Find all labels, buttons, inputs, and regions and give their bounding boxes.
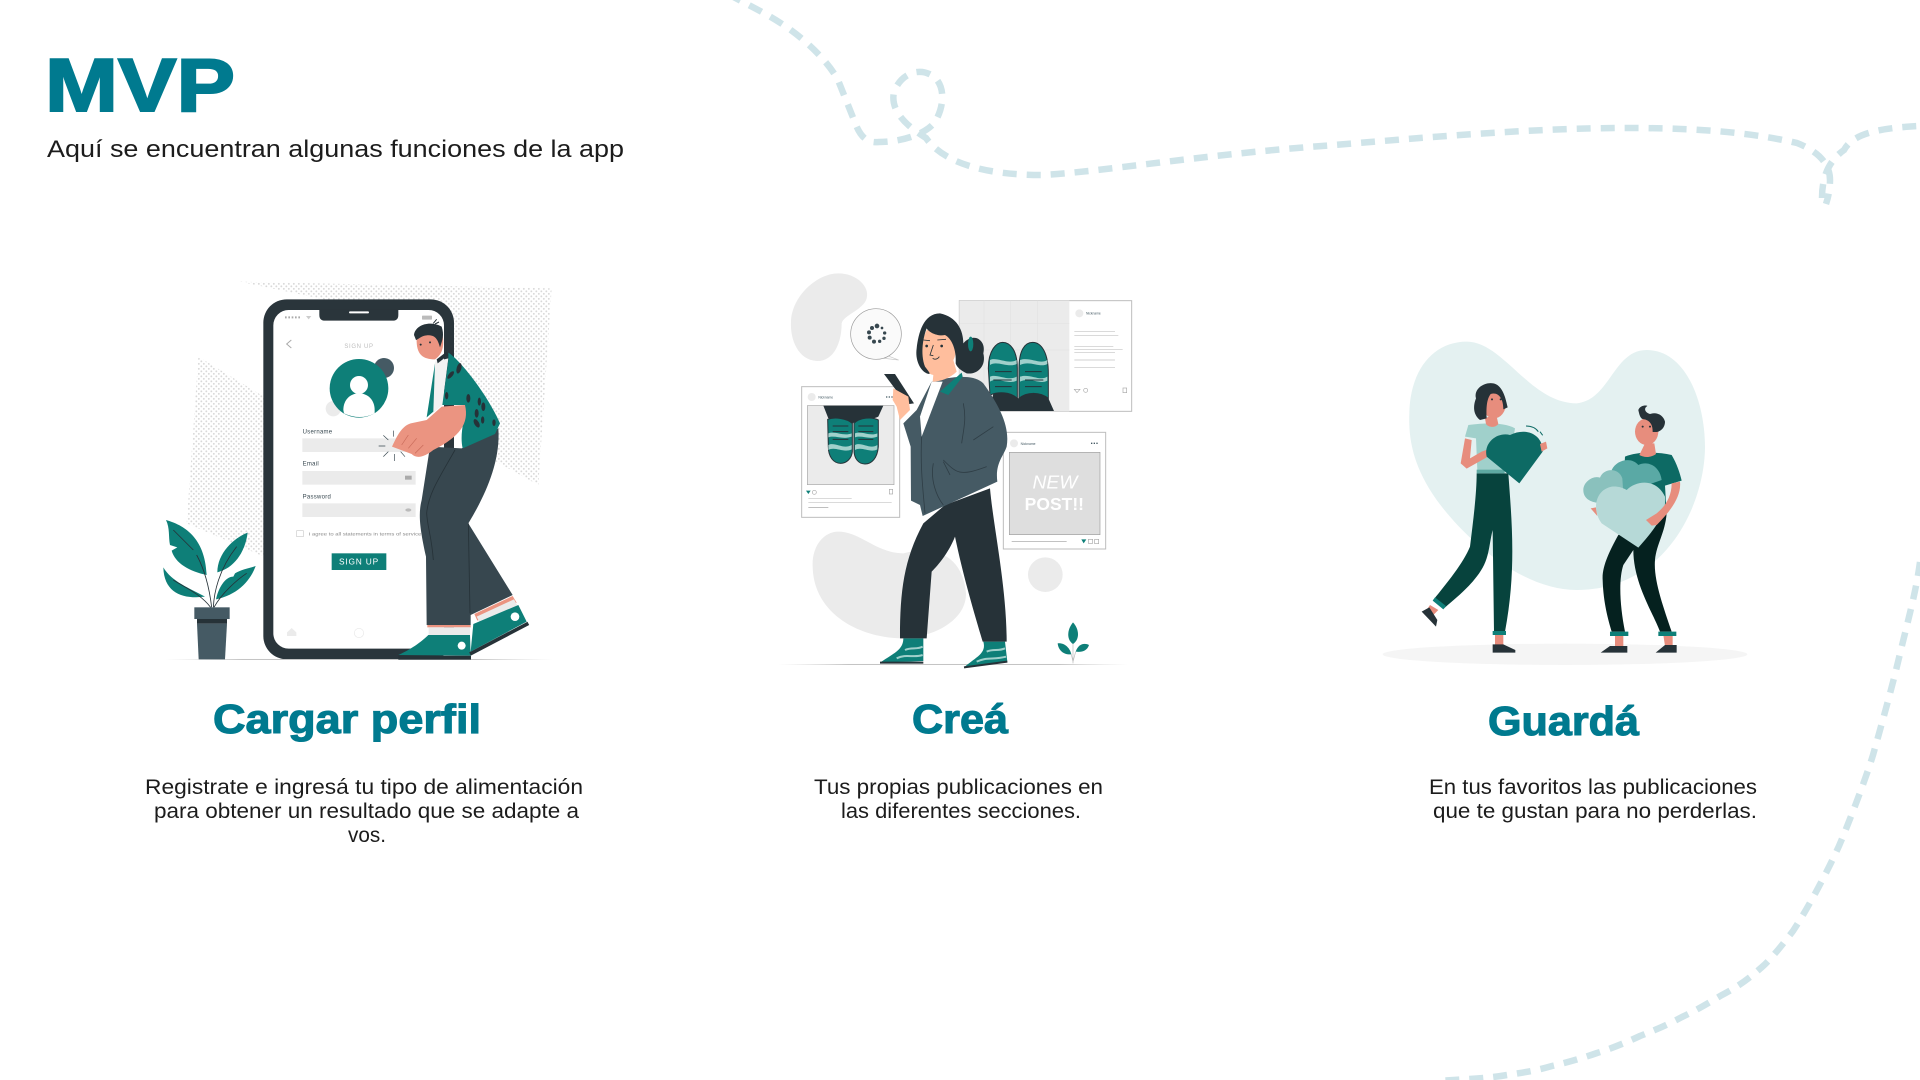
phone: SIGN UP [344,344,374,350]
man [1583,405,1682,653]
post: new post [1003,432,1106,549]
ground line [778,663,1128,666]
text: cargar perfil description: para obtener un resultado que se adapte a [154,799,579,823]
text: cargar perfil description: Registrate e ingresá tu tipo de alimentación [145,775,583,799]
ground ellipse [1383,644,1747,665]
phone: I agree to all statements in terms of service [309,532,422,538]
text: guardá description: En tus favoritos las publicaciones [1429,775,1757,799]
post: top right [959,301,1132,411]
man [379,319,528,660]
text: creá description [814,775,1103,823]
post: new post: POST!! [1025,494,1084,514]
woman [1422,383,1547,653]
text: cargar perfil description: vos. [348,823,386,847]
illustration: man signing up on giant phone [163,282,553,660]
heading: guardá: Guardá [1488,698,1639,744]
heading: cargar perfil: Cargar perfil [213,696,481,742]
decorative dashed line: bottom right [1438,562,1920,1080]
phone: Email [303,462,319,468]
panel: cargar perfil [145,282,583,847]
post: new post: NEW [1032,472,1079,493]
heading: creá: Creá [912,696,1008,742]
dotted background shapes [187,282,552,557]
sprout [1058,622,1089,663]
loading bubble [851,309,901,360]
background blobs [791,273,1063,638]
post: left: Nickname [818,396,833,400]
ground line [165,658,553,661]
phone: Password [303,494,331,500]
text: cargar perfil description [145,775,583,847]
phone: SIGN UP [339,556,379,566]
post: new post: Nickname [1021,442,1036,446]
phone: Username [303,429,333,435]
illustration: two people holding hearts [1383,342,1747,665]
subtitle: Aquí se encuentran algunas funciones de la app [47,136,624,163]
post: left [802,387,900,517]
text: creá description: Tus propias publicaciones en [814,775,1103,799]
text: guardá description: que te gustan para no perderlas. [1433,799,1757,823]
text: creá description: las diferentes secciones. [841,799,1081,823]
illustration: woman with phone and posts [778,273,1132,667]
post: top right: Nickname [1086,312,1101,316]
background blob [1409,342,1705,590]
phone [263,299,454,659]
title: MVP [45,43,235,127]
panel: guardá [1383,342,1757,823]
plant [163,520,256,659]
woman [880,313,1007,667]
panel: creá [778,273,1132,823]
text: guardá description [1429,775,1757,823]
decorative dashed line: top [728,0,1920,204]
